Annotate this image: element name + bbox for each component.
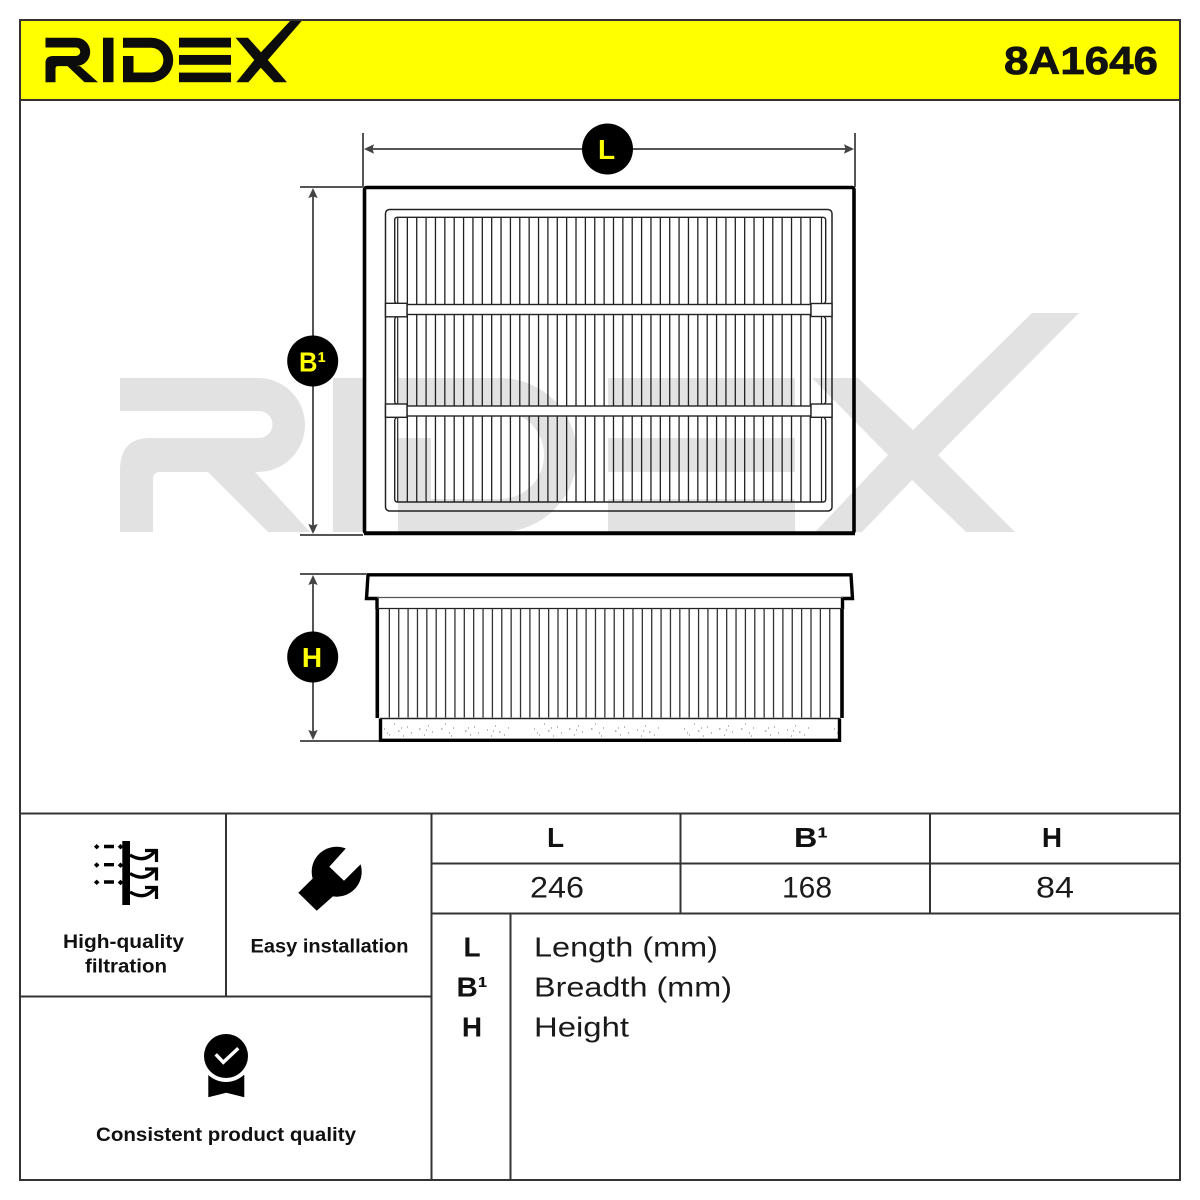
dimension table header: L bbox=[547, 822, 564, 853]
lid bbox=[366, 575, 852, 609]
header band bbox=[20, 20, 1180, 100]
filter top view bbox=[364, 188, 855, 534]
callout H: H bbox=[302, 642, 322, 673]
legend symbols: L bbox=[463, 932, 481, 963]
callout B1 bbox=[287, 336, 338, 386]
label: high-quality filtration: filtration bbox=[85, 956, 167, 978]
part number: 8A1646 bbox=[1004, 40, 1158, 83]
legend symbols: H bbox=[462, 1012, 482, 1042]
label: high-quality filtration bbox=[63, 931, 184, 978]
pleats bbox=[389, 608, 832, 718]
RIDEX logo bbox=[46, 20, 302, 82]
foam base bbox=[380, 718, 840, 740]
feature: consistent product quality bbox=[96, 1030, 356, 1146]
dimension table values: 84 bbox=[1036, 872, 1074, 905]
callout L bbox=[582, 124, 633, 174]
dimension table header: H bbox=[1042, 822, 1062, 853]
inner frame bbox=[386, 210, 832, 511]
pleat panel 2 bbox=[395, 317, 826, 404]
legend descriptions: Breadth (mm) bbox=[534, 972, 732, 1003]
icon: wrench bbox=[298, 836, 372, 911]
spec table grid bbox=[20, 813, 1180, 1180]
callout H bbox=[287, 632, 338, 682]
dimension table values: 246 bbox=[530, 872, 584, 905]
callout L: L bbox=[598, 134, 615, 165]
icon: filtration bbox=[94, 841, 156, 905]
callout B1: B¹ bbox=[299, 347, 326, 378]
dimension table header: B¹ bbox=[794, 822, 828, 853]
dimension B1 bbox=[287, 187, 363, 535]
watermark logo bbox=[120, 313, 1079, 532]
dimension table values bbox=[530, 872, 1074, 905]
legend symbols bbox=[456, 932, 488, 1042]
filter side view bbox=[366, 575, 852, 740]
dimension table header bbox=[547, 822, 1062, 853]
dimension L bbox=[363, 124, 855, 187]
legend descriptions: Length (mm) bbox=[534, 932, 718, 963]
dimension table values: 168 bbox=[782, 872, 832, 905]
pleat panel 1 bbox=[395, 217, 826, 304]
dimension H bbox=[287, 574, 380, 741]
label: consistent product quality: Consistent product quality bbox=[96, 1124, 356, 1146]
legend descriptions bbox=[534, 932, 732, 1043]
support bars bbox=[386, 303, 832, 417]
legend symbols: B¹ bbox=[456, 972, 488, 1002]
pleat panel 3 bbox=[395, 418, 826, 502]
icon: quality badge bbox=[200, 1030, 252, 1097]
feature: easy installation bbox=[250, 836, 408, 957]
label: easy installation: Easy installation bbox=[250, 935, 408, 957]
feature: high-quality filtration bbox=[63, 841, 184, 978]
label: high-quality filtration: High-quality bbox=[63, 931, 184, 953]
legend descriptions: Height bbox=[534, 1012, 629, 1043]
